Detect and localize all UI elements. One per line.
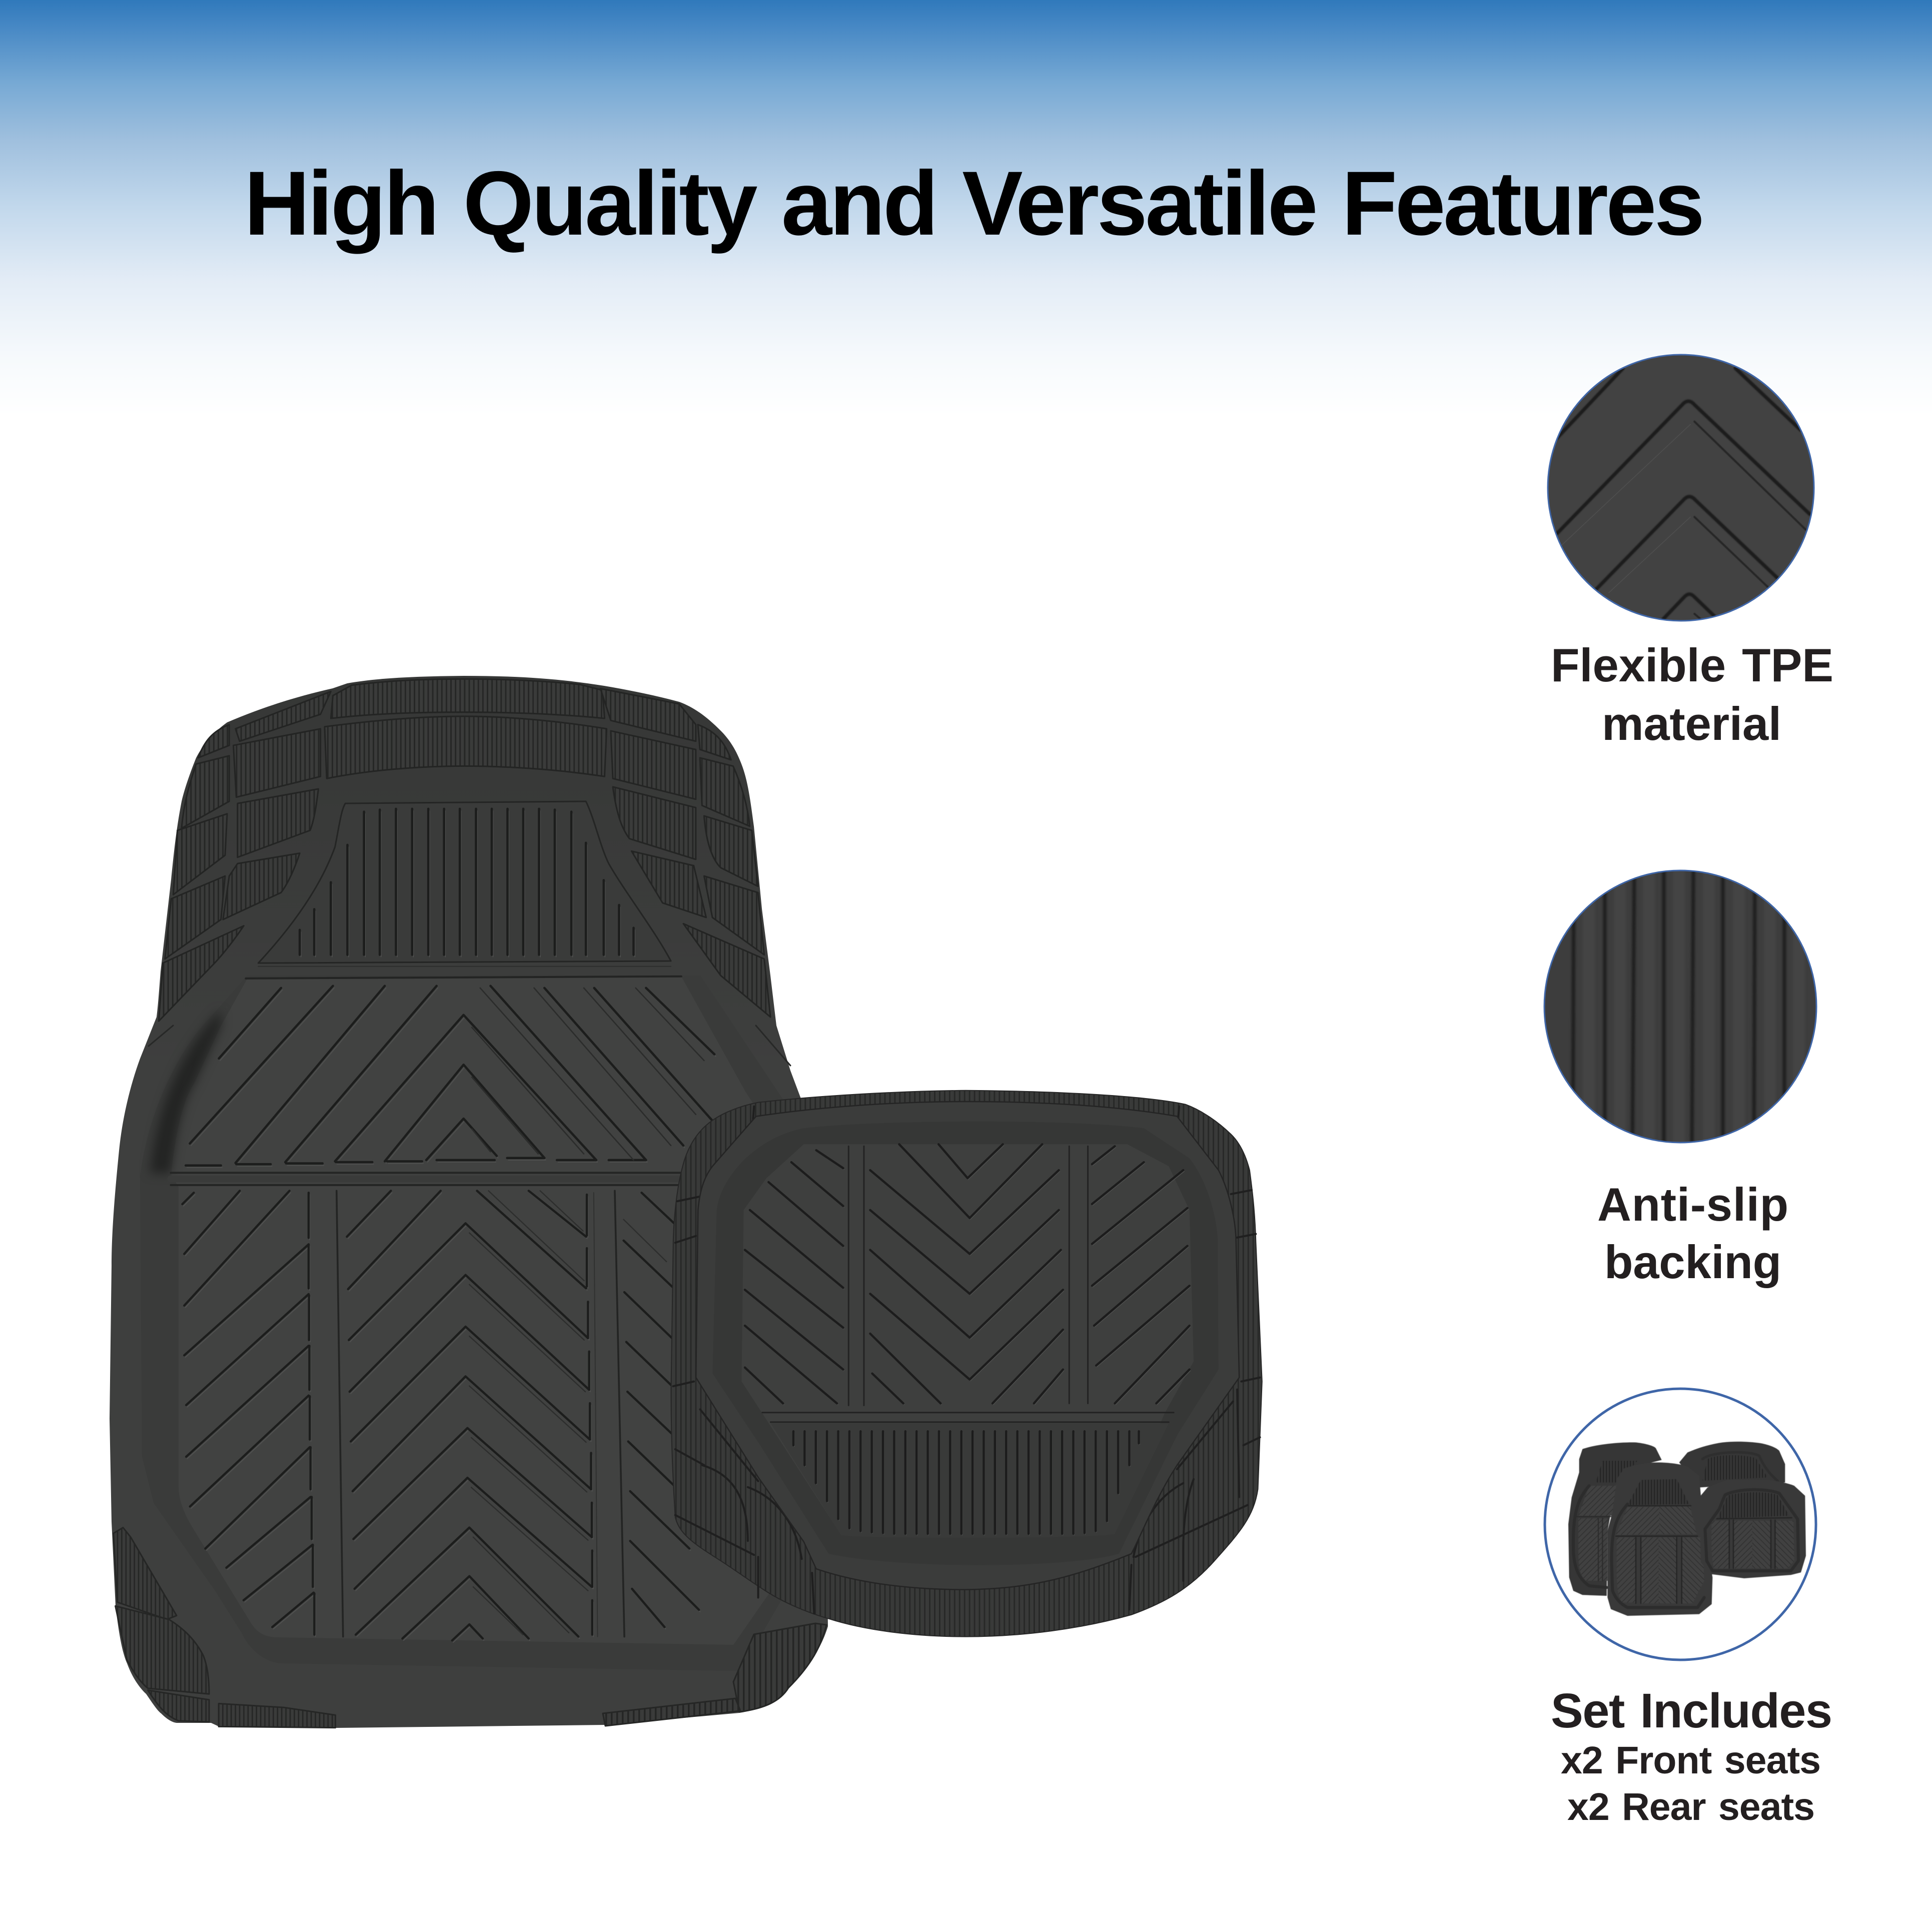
secondary tread lines xyxy=(469,1191,666,1635)
divider bars xyxy=(246,977,681,979)
swatch outline xyxy=(1548,355,1814,621)
label: Set Includes xyxy=(1551,1683,1832,1738)
chevron highlights xyxy=(187,811,716,1168)
tread highlights xyxy=(746,1146,1190,1535)
swatch outline xyxy=(1544,870,1816,1143)
ribbed bottom right strip and corner xyxy=(603,1623,826,1726)
vertical bars xyxy=(848,1146,1088,1405)
horizontal divider bar xyxy=(171,1173,682,1185)
ribbed top blocks xyxy=(159,679,770,1021)
raised smooth rim xyxy=(696,1102,1239,1590)
tray floor xyxy=(171,977,820,1645)
horizontal divider xyxy=(762,1413,1174,1422)
upper tray xyxy=(258,801,671,963)
upper ribbed tray and chevron panel xyxy=(186,801,716,1168)
ribbed floor shade xyxy=(770,1423,1169,1538)
label: Flexible TPE xyxy=(1551,639,1833,691)
feature: flexible TPE xyxy=(1546,353,1833,750)
lower tread panel xyxy=(114,1173,700,1728)
tread dark lines xyxy=(745,1144,1190,1534)
tread highlights xyxy=(184,1193,700,1642)
mini mat: back right xyxy=(1679,1442,1785,1487)
mini mat: front right xyxy=(1699,1480,1806,1578)
ribbed bottom corners xyxy=(114,1528,335,1728)
rear floor mat xyxy=(671,1091,1262,1637)
label second line: backing xyxy=(1604,1236,1781,1288)
set of four mats xyxy=(1568,1442,1806,1616)
rib block separators xyxy=(673,1107,1260,1613)
chevron dark lines xyxy=(186,809,714,1166)
feature: anti-slip backing xyxy=(1543,865,1818,1288)
vertical bars xyxy=(337,1191,624,1637)
swatch: chevron texture xyxy=(1546,353,1816,623)
mat silhouette xyxy=(110,676,828,1728)
label second line: material xyxy=(1602,697,1781,750)
swatch outline xyxy=(1545,1389,1816,1660)
mini mat: back left xyxy=(1568,1442,1662,1596)
secondary chevron lines xyxy=(472,988,704,1160)
tread dark lines xyxy=(182,1191,699,1640)
rim accent lines xyxy=(149,1026,790,1066)
title: High Quality and Versatile Features xyxy=(244,152,1705,254)
background gradient header xyxy=(0,0,1932,415)
feature: set includes xyxy=(1545,1389,1832,1828)
front seats count: x2 Front seats xyxy=(1561,1739,1821,1782)
tray wall xyxy=(712,1122,1219,1565)
label: Anti-slip xyxy=(1597,1178,1788,1231)
rear mat silhouette with ribbed edge xyxy=(671,1091,1262,1637)
rear seats count: x2 Rear seats xyxy=(1567,1785,1815,1828)
tray floor xyxy=(741,1144,1194,1538)
swatch: vertical rib texture xyxy=(1543,865,1818,1151)
mini mat: front center xyxy=(1607,1462,1712,1616)
tray wall xyxy=(140,976,850,1671)
dark wall shadow crescent xyxy=(150,1011,221,1173)
front floor mat xyxy=(110,676,850,1728)
